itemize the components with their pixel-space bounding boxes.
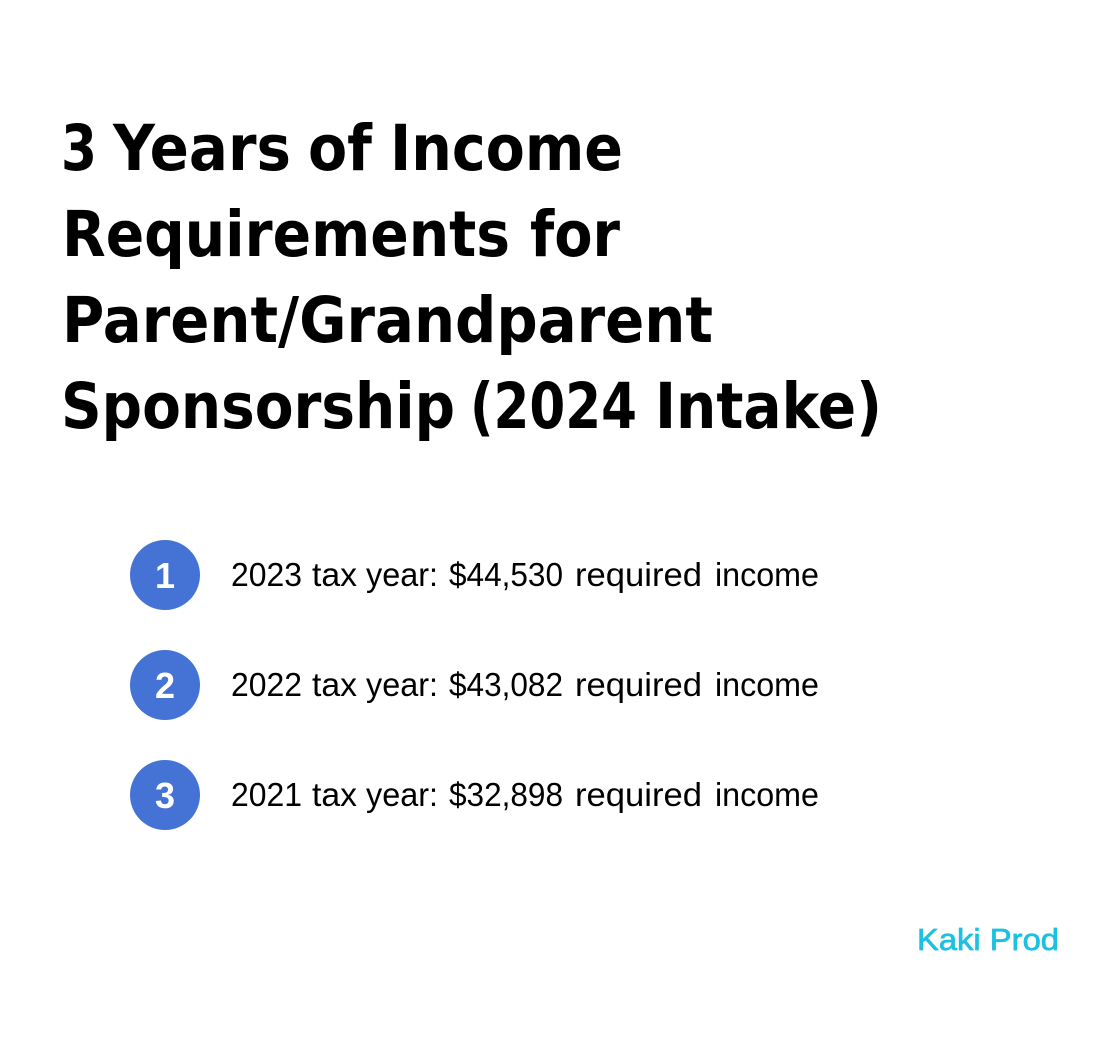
title: Requirements <box>62 198 510 271</box>
number badge 3 <box>130 760 200 830</box>
list text 3: required <box>575 777 702 814</box>
list text 3: income <box>715 777 819 814</box>
title: 3 <box>61 112 97 185</box>
number badge 1: 1 <box>155 555 175 596</box>
list text 3: $32,898 <box>449 777 563 814</box>
list text 3: tax <box>312 777 357 814</box>
number badge 1 <box>130 540 200 610</box>
logo: Kaki Prod: Kaki Prod <box>917 922 1059 957</box>
list item 1 <box>130 540 819 610</box>
title: of <box>308 112 373 185</box>
title: Parent/Grandparent <box>62 284 713 357</box>
title: Income <box>390 112 623 185</box>
list text 3: year: <box>366 777 438 814</box>
title: Sponsorship <box>61 370 455 443</box>
list text 2: 2022 <box>231 667 302 704</box>
list text 1: income <box>715 557 819 594</box>
list text 3: 2021 <box>231 777 302 814</box>
number badge 2 <box>130 650 200 720</box>
list text 1: 2023 <box>231 557 302 594</box>
title <box>61 112 882 443</box>
number badge 3: 3 <box>155 775 175 816</box>
list item 2 <box>130 650 819 720</box>
list text 1: required <box>575 557 702 594</box>
list text 1: tax <box>312 557 357 594</box>
number badge 2: 2 <box>155 665 175 706</box>
title: Intake) <box>655 370 882 443</box>
list item 3 <box>130 760 819 830</box>
list text 1: year: <box>366 557 438 594</box>
list text 2: year: <box>366 667 438 704</box>
list text 1: $44,530 <box>449 557 563 594</box>
list text 2: required <box>575 667 702 704</box>
list text 2: tax <box>312 667 357 704</box>
list text 2: $43,082 <box>449 667 563 704</box>
list text 2: income <box>715 667 819 704</box>
title: (2024 <box>470 370 637 443</box>
title: Years <box>112 112 291 185</box>
title: for <box>530 198 620 271</box>
